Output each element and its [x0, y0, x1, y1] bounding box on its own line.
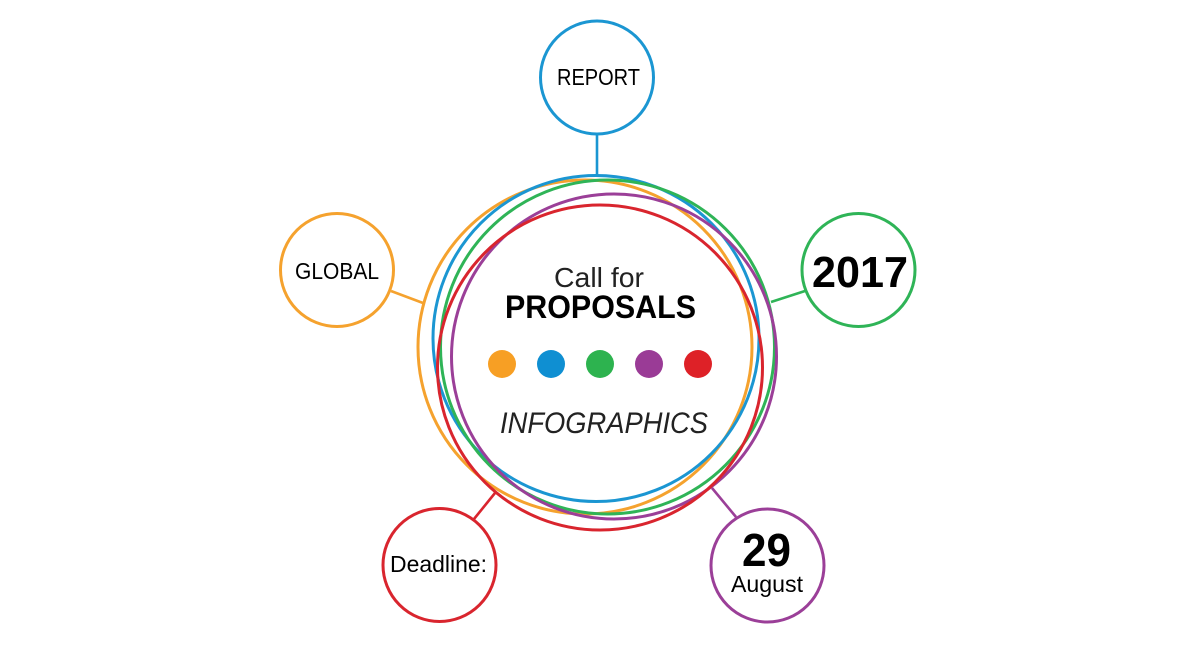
ring group: overlapping central circles [418, 176, 776, 530]
heading: call for: Call for [554, 262, 644, 293]
connector: report [596, 134, 598, 176]
connector: global [391, 291, 423, 303]
text: infographics: INFOGRAPHICS [500, 407, 708, 440]
node: global: GLOBAL [295, 258, 379, 284]
node: 2017 [802, 214, 915, 326]
node: report: REPORT [557, 64, 640, 90]
connector: 2017 [771, 291, 805, 302]
node: deadline [383, 508, 496, 622]
node: 29 august [711, 509, 824, 622]
node: 2017: 2017 [812, 248, 908, 297]
node: 29 august: 29 [742, 524, 791, 576]
connector: deadline [474, 493, 495, 519]
heading: proposals: PROPOSALS [505, 289, 696, 325]
node: report [540, 21, 654, 134]
connector: august [712, 488, 736, 517]
node: 29 august: August [731, 571, 804, 597]
node: deadline: Deadline: [390, 551, 487, 577]
colour dots [488, 350, 712, 378]
node: global [280, 214, 394, 326]
